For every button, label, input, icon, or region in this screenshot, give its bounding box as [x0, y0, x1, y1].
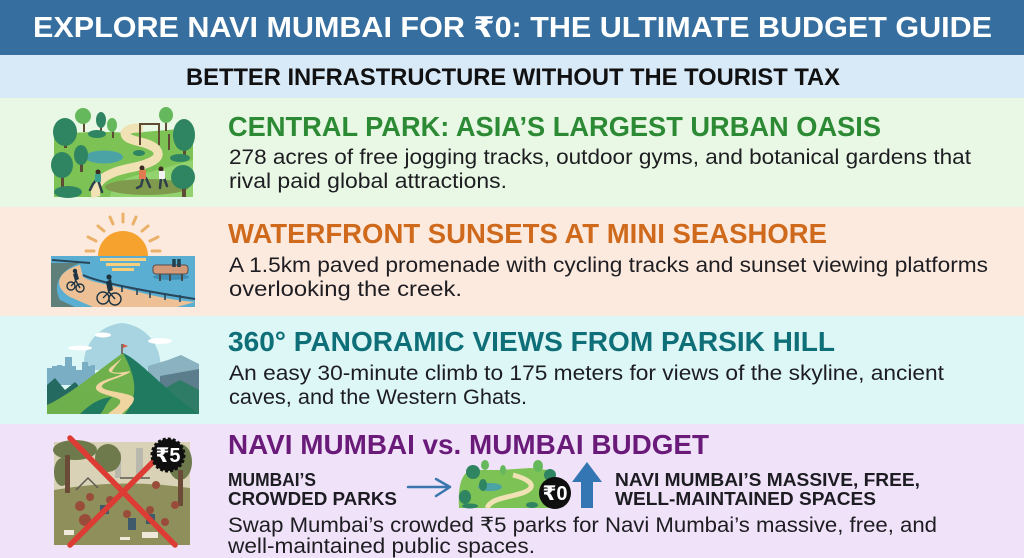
text: seashore description	[229, 254, 988, 301]
text: central park description: rival paid global attractions.	[229, 170, 507, 193]
icon: sunset promenade	[51, 214, 195, 307]
label: navi mumbai spaces: NAVI MUMBAI’S MASSIVE, FREE,	[615, 469, 920, 490]
text: budget description: Swap Mumbai’s crowded ₹5 parks for Navi Mumbai’s massive, free, and	[228, 514, 937, 537]
heading: budget comparison: NAVI MUMBAI vs. MUMBAI BUDGET	[228, 429, 709, 460]
icon: free park	[459, 460, 571, 509]
text: parsik description: caves, and the Western Ghats.	[229, 386, 527, 409]
icon: park illustration	[51, 107, 195, 198]
heading: parsik hill: 360° PANORAMIC VIEWS FROM PARSIK HILL	[228, 326, 835, 357]
icon: hill panorama	[47, 323, 199, 414]
arrow: up	[572, 462, 602, 508]
text: parsik description: An easy 30-minute climb to 175 meters for views of the skyline, ancient	[229, 362, 944, 385]
panel: budget comparison	[0, 424, 1024, 558]
heading: mini seashore: WATERFRONT SUNSETS AT MINI SEASHORE	[228, 218, 827, 249]
arrow: to Navi Mumbai	[408, 479, 450, 496]
panel: central park	[0, 98, 1024, 207]
label: mumbai's crowded parks	[228, 469, 397, 509]
heading: central park: CENTRAL PARK: ASIA’S LARGEST URBAN OASIS	[228, 111, 881, 142]
subtitle: BETTER INFRASTRUCTURE WITHOUT THE TOURIST TAX	[186, 64, 840, 91]
text: budget description: well-maintained public spaces.	[227, 535, 535, 558]
label: mumbai's crowded parks: MUMBAI’S	[228, 469, 316, 490]
panel: title banner	[0, 0, 1024, 55]
panel: subtitle band	[0, 55, 1024, 98]
label: navi mumbai spaces: WELL-MAINTAINED SPACES	[615, 488, 876, 509]
text: seashore description: overlooking the creek.	[229, 278, 462, 301]
label: mumbai's crowded parks: CROWDED PARKS	[228, 488, 397, 509]
panel: parsik hill	[0, 316, 1024, 424]
label: navi mumbai spaces	[615, 469, 920, 509]
icon: crossed-out crowded park: ₹5	[155, 445, 181, 467]
panel: mini seashore	[0, 207, 1024, 316]
title: EXPLORE NAVI MUMBAI FOR ₹0: THE ULTIMATE BUDGET GUIDE	[33, 12, 992, 44]
text: parsik description	[229, 362, 944, 409]
text: central park description: 278 acres of free jogging tracks, outdoor gyms, and botanical gardens that	[229, 146, 971, 169]
text: seashore description: A 1.5km paved promenade with cycling tracks and sunset viewing platforms	[229, 254, 988, 277]
icon: crossed-out crowded park	[53, 438, 192, 545]
text: central park description	[229, 146, 971, 193]
text: budget description	[227, 514, 937, 558]
icon: free park: ₹0	[542, 483, 568, 505]
